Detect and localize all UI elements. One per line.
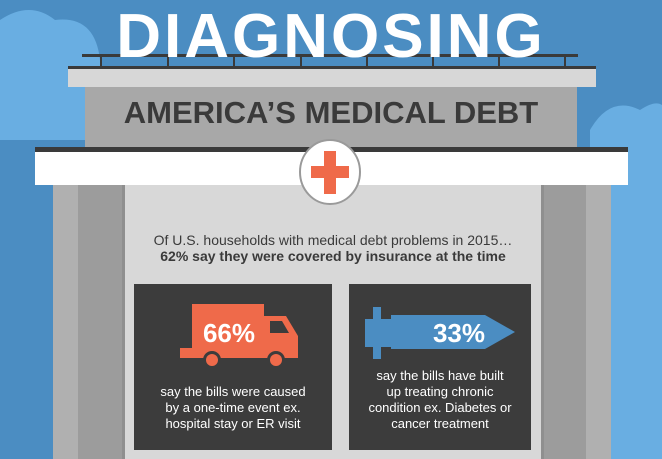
intro text — [154, 232, 512, 264]
title: DIAGNOSING — [116, 2, 546, 71]
text: condition ex. Diabetes or — [368, 400, 512, 415]
panel: chronic condition — [349, 284, 531, 450]
intro text: 62% say they were covered by insurance at the time — [160, 248, 506, 264]
icon: cross — [299, 139, 361, 205]
stat 66%: 66% — [203, 318, 255, 348]
icon: syringe — [365, 307, 515, 359]
text — [368, 368, 512, 431]
text: cancer treatment — [391, 416, 489, 431]
awning — [35, 147, 628, 152]
text: hospital stay or ER visit — [165, 416, 301, 431]
text: up treating chronic — [387, 384, 493, 399]
text: by a one-time event ex. — [165, 400, 301, 415]
roof slab — [68, 69, 596, 87]
subtitle: AMERICA’S MEDICAL DEBT — [124, 95, 538, 130]
panel: one-time event — [134, 284, 332, 450]
text — [160, 384, 306, 431]
intro text: Of U.S. households with medical debt problems in 2015… — [154, 232, 512, 248]
inner panel — [122, 185, 544, 459]
icon: truck — [180, 304, 298, 366]
text: say the bills have built — [376, 368, 504, 383]
roof rail — [68, 54, 596, 69]
text: say the bills were caused — [160, 384, 306, 399]
stat 33%: 33% — [433, 318, 485, 348]
upper wall — [85, 87, 577, 149]
lower building pillars — [53, 185, 611, 459]
